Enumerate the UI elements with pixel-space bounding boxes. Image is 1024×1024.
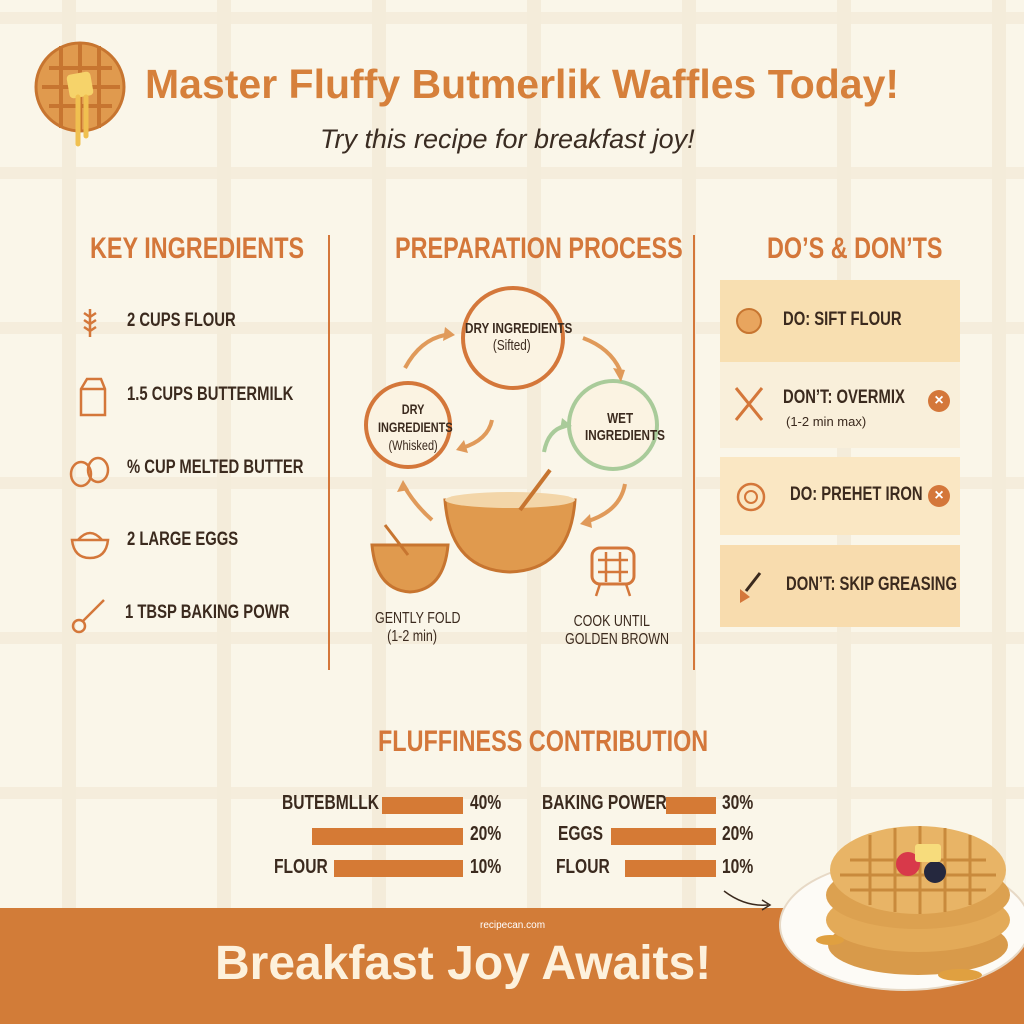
panel: fluffiness contribution chart: 30%: [722, 792, 753, 814]
label: dry whisked: INGREDIENTS: [378, 419, 453, 435]
subtitle: Try this recipe for breakfast joy!: [320, 124, 695, 154]
ingredient 3: [70, 456, 304, 488]
title: Master Fluffy Butmerlik Waffles Today!: [145, 61, 899, 107]
ingredient 5: [72, 599, 290, 634]
label: dry sifted: [465, 320, 572, 354]
panel: fluffiness contribution chart: BAKING POWER: [542, 792, 667, 814]
dont: overmix: ×: [934, 392, 944, 409]
panel: fluffiness contribution chart: 40%: [470, 792, 501, 814]
do: sift flour: [720, 280, 960, 362]
ingredient 1: [83, 309, 236, 337]
do: sift flour: DO: SIFT FLOUR: [783, 309, 902, 330]
do: preheat: [720, 457, 960, 535]
do: preheat: DO: PREHET IRON: [790, 484, 923, 505]
label: gently fold: (1-2 min): [387, 628, 437, 645]
label: dry whisked: DRY: [402, 401, 424, 417]
footer text: Breakfast Joy Awaits!: [215, 937, 711, 990]
panel: fluffiness contribution chart: 20%: [722, 823, 753, 845]
heading: key ingredients: KEY INGREDIENTS: [90, 232, 304, 265]
ingredient 1: 2 CUPS FLOUR: [127, 310, 236, 331]
panel: fluffiness contribution chart: FLOUR: [556, 856, 610, 878]
icon: waffle logo: [34, 42, 126, 146]
panel: fluffiness contribution chart: FLOUR: [274, 856, 328, 878]
dont: skip greasing: [720, 545, 960, 627]
panel: fluffiness contribution chart: 10%: [470, 856, 501, 878]
panel: fluffiness contribution chart: 10%: [722, 856, 753, 878]
ingredient 4: 2 LARGE EGGS: [127, 529, 238, 550]
watermark: recipecan.com: [480, 920, 545, 931]
panel: dos and donts: [720, 232, 960, 627]
illustration: waffle stack: [779, 826, 1024, 991]
panel: fluffiness contribution chart: 20%: [470, 823, 501, 845]
label: dry whisked: [378, 401, 453, 453]
ingredient 5: 1 TBSP BAKING POWR: [125, 602, 289, 623]
label: gently fold: GENTLY FOLD: [375, 610, 461, 627]
ingredient 2: [80, 378, 294, 416]
process diagram: [364, 286, 659, 596]
heading: fluffiness: FLUFFINESS CONTRIBUTION: [378, 725, 708, 758]
panel: preparation process: [364, 232, 683, 648]
panel: fluffiness contribution chart: EGGS: [558, 823, 603, 845]
arrow: [724, 890, 772, 911]
label: dry whisked: (Whisked): [389, 437, 438, 453]
label: cook: GOLDEN BROWN: [565, 631, 669, 648]
label: wet: [585, 410, 665, 444]
ingredient 2: 1.5 CUPS BUTTERMILK: [127, 384, 293, 405]
ingredient 3: % CUP MELTED BUTTER: [127, 457, 303, 478]
heading: preparation process: PREPARATION PROCESS: [395, 232, 683, 265]
label: dry sifted: (Sifted): [493, 337, 531, 354]
label: gently fold: [375, 610, 461, 645]
panel: fluffiness contribution chart: BUTEBMLLK: [282, 792, 379, 814]
heading: dos and donts: DO’S & DON’TS: [767, 232, 943, 265]
label: wet: INGREDIENTS: [585, 427, 665, 444]
dont: overmix: (1-2 min max): [786, 414, 866, 429]
label: cook: [565, 613, 669, 648]
dont: overmix: DON’T: OVERMIX: [783, 387, 905, 408]
label: dry sifted: DRY INGREDIENTS: [465, 320, 572, 337]
footer band: [0, 908, 1024, 1024]
ingredient 4: [70, 529, 238, 560]
do: preheat: ×: [934, 487, 944, 504]
panel: fluffiness contribution chart: [274, 725, 753, 878]
label: wet: WET: [607, 410, 633, 427]
panel: key ingredients: [70, 232, 304, 634]
dont: skip greasing: DON’T: SKIP GREASING: [786, 574, 957, 595]
label: cook: COOK UNTIL: [574, 613, 650, 630]
dont: overmix: [720, 362, 960, 448]
